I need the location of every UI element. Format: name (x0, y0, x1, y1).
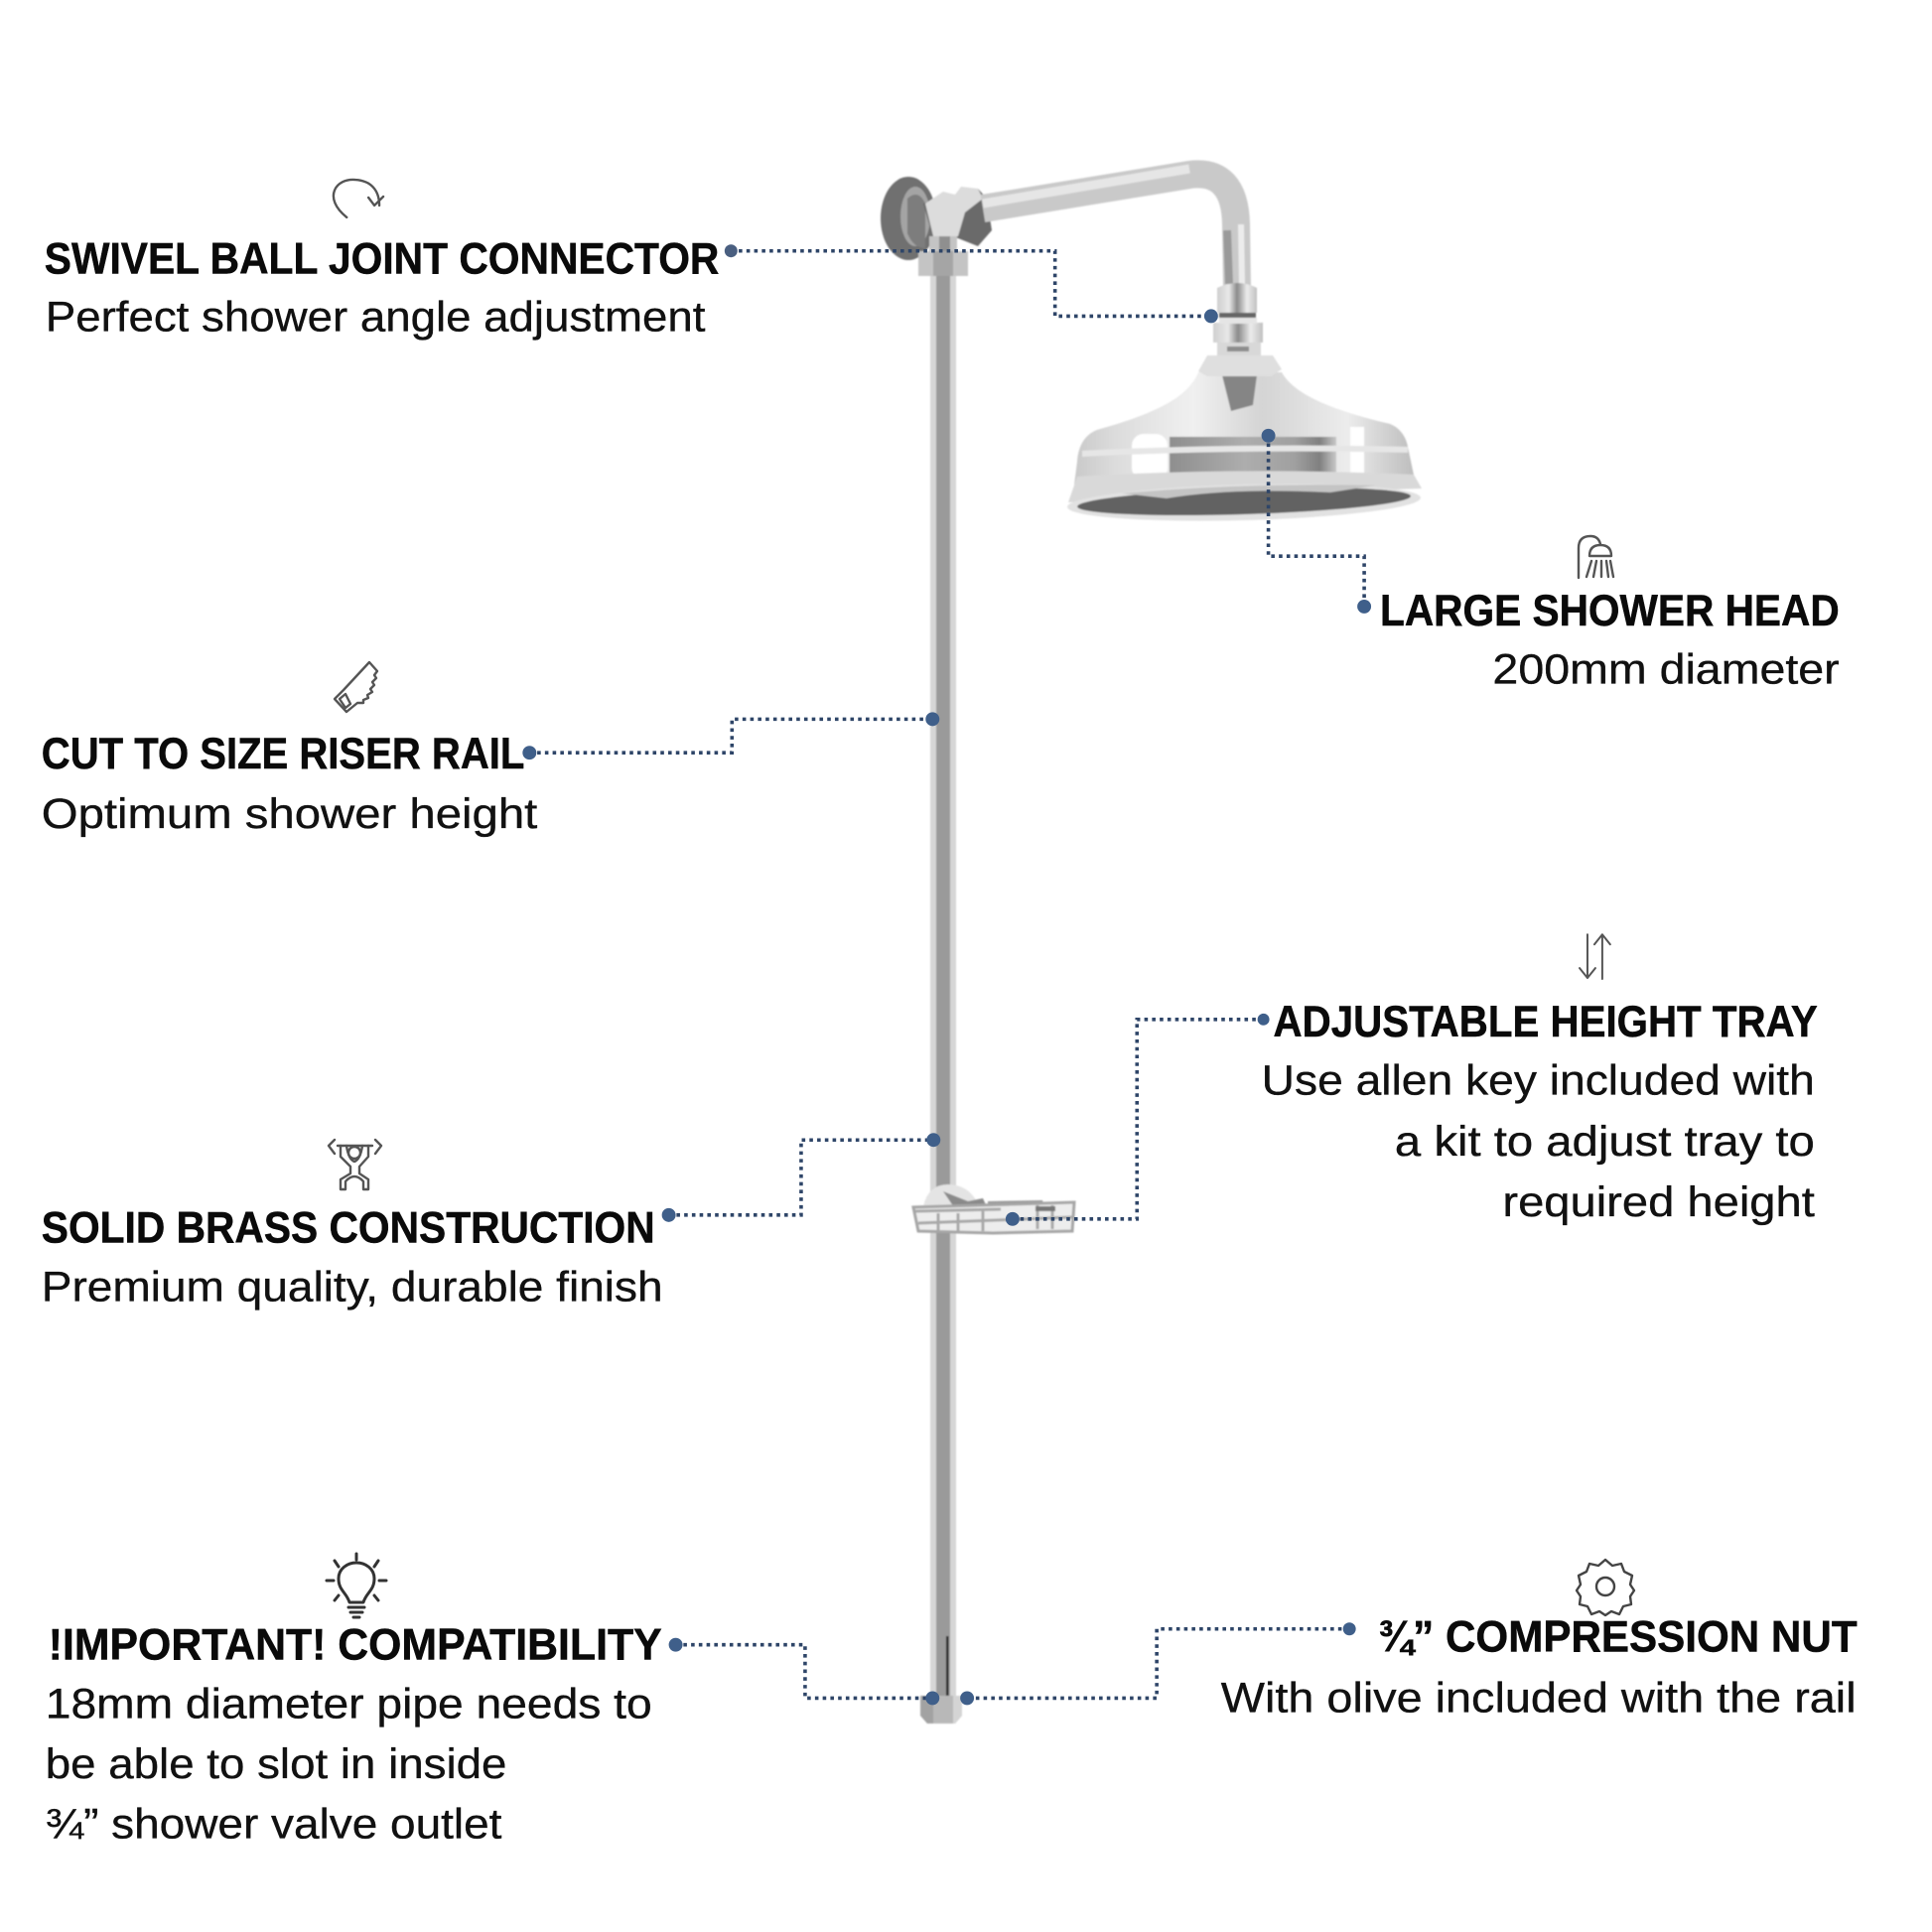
heading: ¾” COMPRESSION NUT (1378, 1612, 1858, 1662)
icon: up and down arrows (1580, 934, 1610, 979)
description: Premium quality, durable finish (42, 1263, 663, 1311)
illustration: chrome shower rail kit (881, 169, 1422, 1724)
heading: SWIVEL BALL JOINT CONNECTOR (45, 234, 719, 284)
callout: adjustable height tray (1262, 997, 1818, 1226)
heading: LARGE SHOWER HEAD (1380, 586, 1840, 635)
heading: CUT TO SIZE RISER RAIL (42, 729, 524, 778)
wall bracket and swivel joint (881, 177, 992, 276)
connector: compression nut (960, 1622, 1356, 1705)
callout: solid brass construction (42, 1203, 663, 1311)
callout: large shower head (1380, 586, 1840, 694)
riser rail (930, 268, 956, 1703)
description: required height (1502, 1178, 1815, 1226)
shower arm (983, 169, 1242, 288)
connector: swivel ball joint (725, 244, 1218, 323)
heading: !IMPORTANT! COMPATIBILITY (49, 1620, 662, 1670)
connector: compatibility (669, 1638, 939, 1705)
icon: shower (1579, 536, 1613, 578)
description: Perfect shower angle adjustment (46, 293, 706, 341)
description (46, 1680, 652, 1849)
heading: SOLID BRASS CONSTRUCTION (42, 1203, 655, 1253)
connector: adjustable tray (1006, 1014, 1270, 1226)
callout: swivel ball joint connector (45, 234, 719, 341)
icon: rotation arrow (334, 180, 383, 217)
shower head body (1067, 355, 1422, 525)
description: Optimum shower height (42, 790, 537, 838)
connector: riser rail (522, 712, 939, 759)
head connector collars (1213, 283, 1263, 356)
connector: large shower head (1262, 429, 1371, 614)
icon: hand saw (335, 662, 377, 712)
rail base compression nut (920, 1696, 962, 1724)
description: be able to slot in inside (46, 1740, 506, 1788)
sliding soap tray (913, 1184, 1074, 1233)
description (1262, 1056, 1815, 1226)
description: ¾” shower valve outlet (46, 1801, 502, 1849)
description: a kit to adjust tray to (1395, 1118, 1815, 1166)
description: 200mm diameter (1492, 646, 1840, 694)
connector: solid brass (662, 1133, 940, 1222)
description: Use allen key included with (1262, 1056, 1815, 1104)
description: 18mm diameter pipe needs to (46, 1680, 652, 1727)
description: With olive included with the rail (1221, 1674, 1857, 1722)
callout: important compatibility (46, 1620, 662, 1849)
heading: ADJUSTABLE HEIGHT TRAY (1274, 997, 1818, 1046)
icon: gear (1577, 1560, 1634, 1615)
icon: light bulb (327, 1554, 386, 1617)
callout: cut to size riser rail (42, 729, 537, 838)
icon: weightlifter (329, 1140, 381, 1189)
callout: compression nut (1221, 1612, 1858, 1722)
shower head dome (1074, 372, 1416, 484)
